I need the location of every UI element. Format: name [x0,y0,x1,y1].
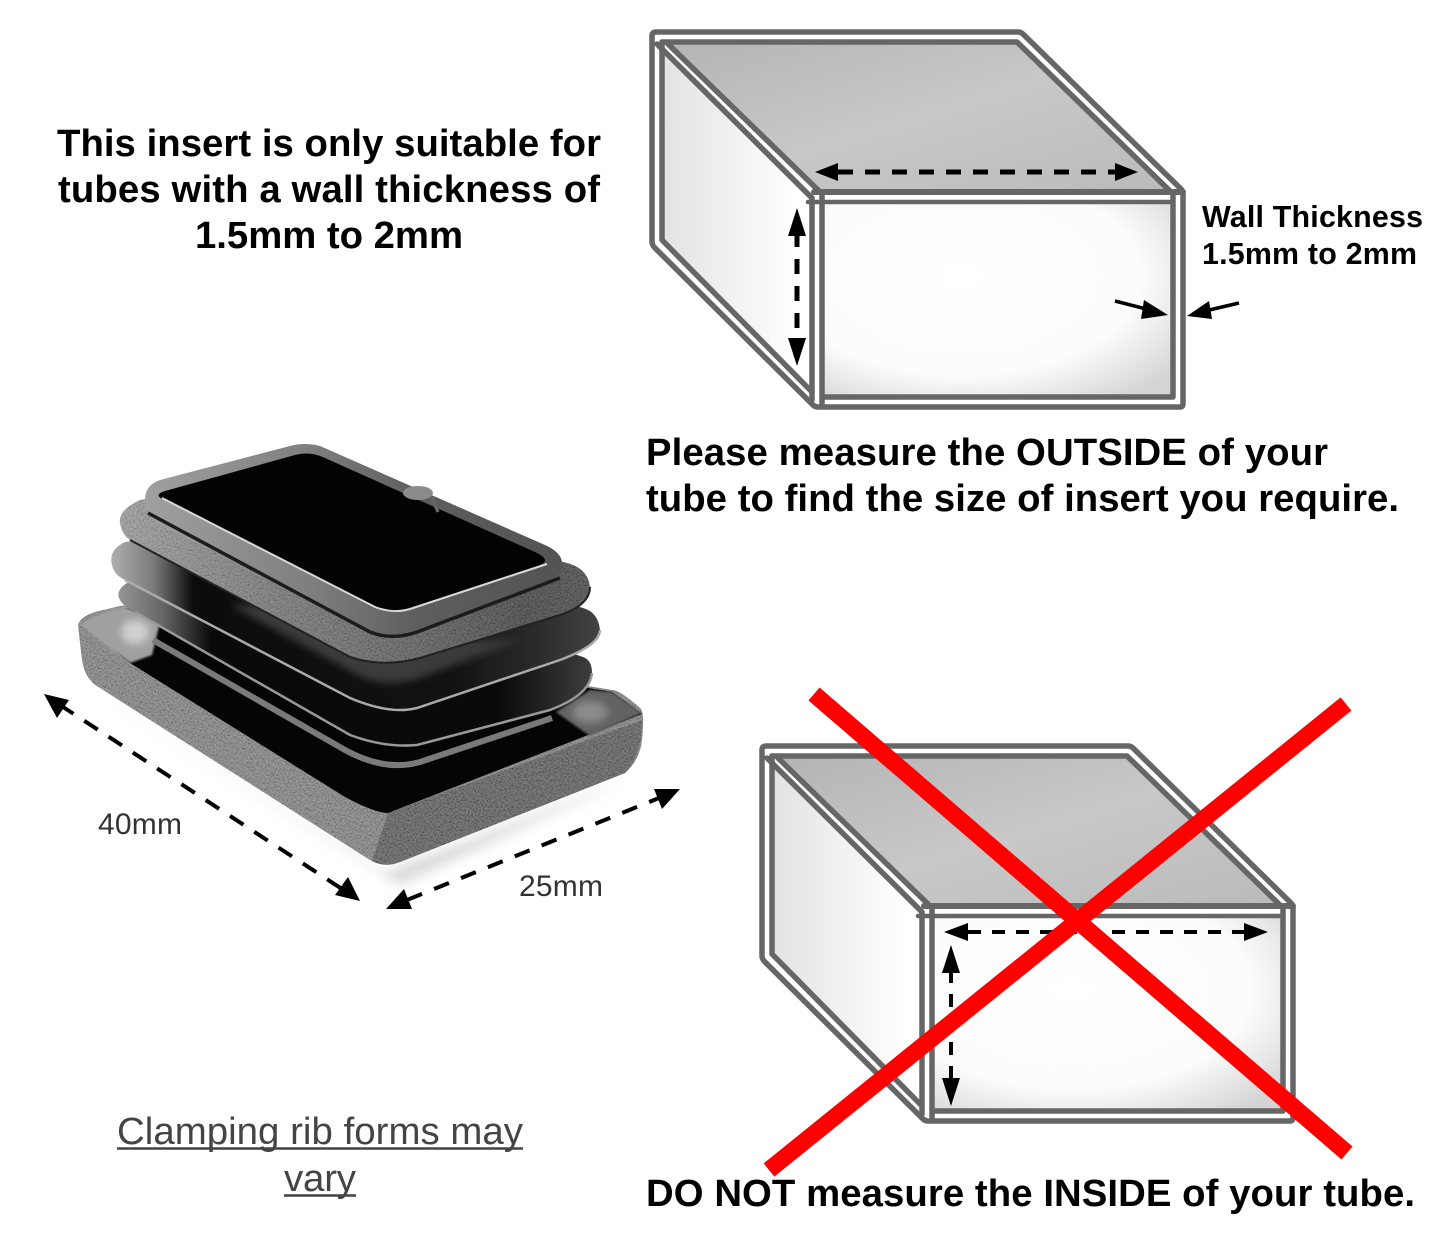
instruction: measure the outside: tube to find the size of insert you require. [646,477,1399,520]
arrow head: outside height top [788,208,806,236]
dimension arrow: 40mm [44,694,360,901]
notice: wall thickness suitability: 1.5mm to 2mm [195,214,463,257]
label: wall thickness: 1.5mm to 2mm [1202,237,1417,271]
notice: wall thickness suitability: This insert is only suitable for [57,122,601,165]
notice: wall thickness suitability [57,122,601,257]
label: wall thickness [1202,200,1423,271]
arrow: inside width [968,930,1244,934]
arrow head: outside height bottom [788,338,806,366]
arrow: wall thickness inner [1115,300,1168,319]
arrow head: inside width right [1244,923,1268,941]
instruction: measure the outside: Please measure the OUTSIDE of your [646,431,1328,474]
top rim [145,444,562,636]
label: wall thickness: Wall Thickness [1202,200,1423,234]
clamping ribs [111,470,600,746]
soft shadow [100,695,625,885]
note: clamping rib forms [117,1110,524,1200]
warning: do not measure the inside: DO NOT measure the INSIDE of your tube. [646,1172,1415,1215]
arrow head: outside width right [1115,163,1138,181]
notice: wall thickness suitability: tubes with a wall thickness of [58,168,600,211]
instruction: measure the outside [646,431,1399,520]
arrow head: inside width left [944,923,968,941]
label: 40mm: 40mm [98,808,182,841]
dimension arrow: 25mm [386,789,680,909]
label: 25mm: 25mm [519,870,603,903]
note: clamping rib forms: vary [284,1157,357,1200]
arrow: outside height [794,232,800,345]
arrow: wall thickness outer [1187,301,1239,319]
arrow: outside width [838,170,1116,174]
arrow head: outside width left [815,163,838,181]
diagram: incorrect inside measurement tube [762,746,1293,1121]
note: clamping rib forms: Clamping rib forms may [117,1110,524,1153]
base plate [78,606,643,865]
red cross [769,694,1347,1170]
arrow: inside height [949,970,953,1082]
photo: plastic tube insert [78,444,643,885]
diagram: correct outside measurement tube [652,32,1239,407]
arrow head: inside height top [942,945,960,973]
arrow head: inside height bottom [942,1078,960,1106]
neck band [153,640,552,765]
